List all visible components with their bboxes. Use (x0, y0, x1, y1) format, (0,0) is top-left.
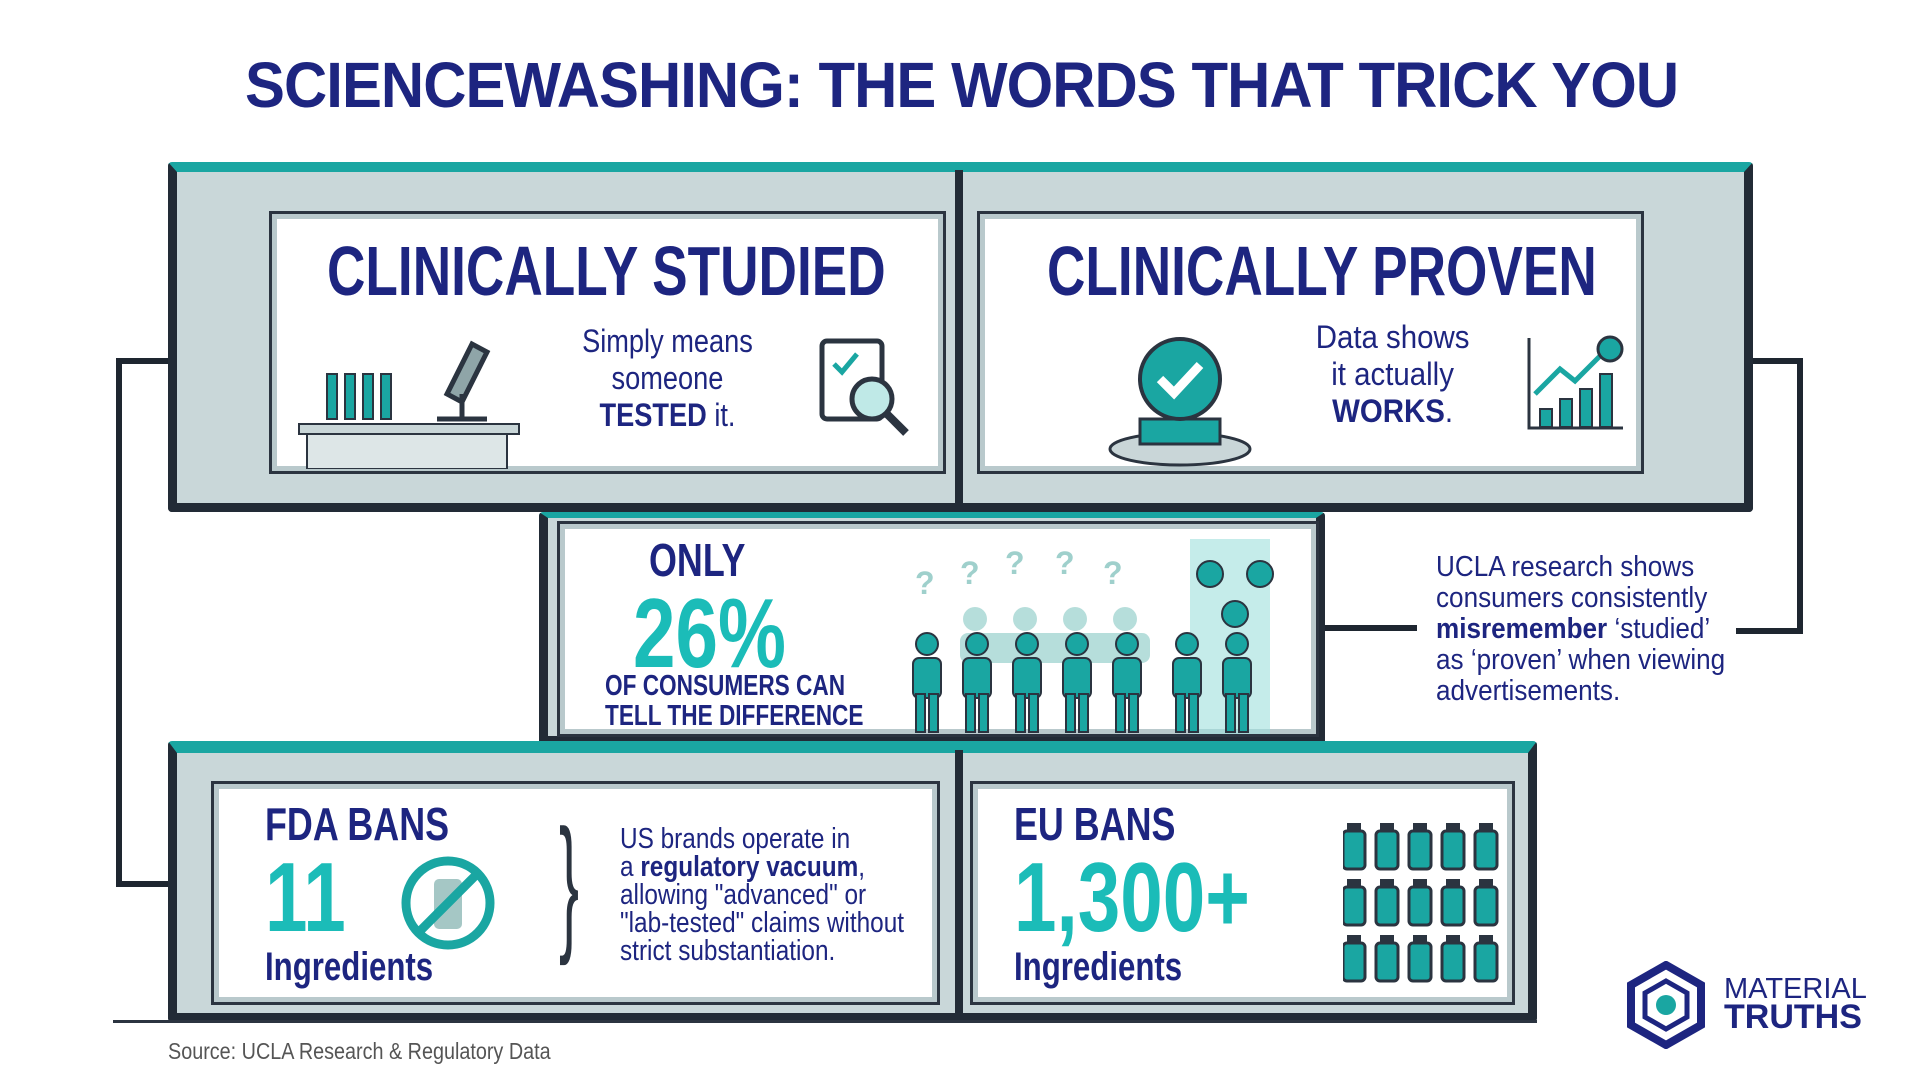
icon: check badge (1108, 337, 1252, 466)
icon: people crowd: ? (1005, 545, 1025, 581)
heading: clinically studied: CLINICALLY STUDIED (327, 232, 886, 310)
panel: top building (168, 162, 1753, 512)
logo: material truths (1627, 961, 1867, 1049)
logo: material truths: TRUTHS (1724, 998, 1862, 1036)
icon: lab bench (298, 340, 520, 469)
icon: people crowd: ? (1103, 555, 1123, 591)
callout: ucla research: consumers consistently (1436, 582, 1707, 614)
panel: only 26% (560, 524, 1316, 734)
icon: bottle grid (1343, 823, 1498, 982)
panel: eu bans (973, 784, 1512, 1002)
icon: people crowd: ? (1055, 545, 1075, 581)
stat: fda 11 (265, 798, 449, 989)
text: us brands: "lab-tested" claims without (620, 907, 904, 939)
text: us brands: a regulatory vacuum, (620, 851, 865, 883)
stat: eu 1300: Ingredients (1014, 945, 1182, 989)
text: data shows: WORKS. (1332, 393, 1454, 429)
text: simply means: Simply means (582, 323, 752, 359)
text: us brands (620, 823, 904, 967)
stat: eu 1300: 1,300+ (1014, 842, 1250, 952)
icon: people crowd (912, 539, 1274, 734)
heading: clinically proven: CLINICALLY PROVEN (1047, 232, 1597, 310)
text: data shows (1316, 319, 1470, 429)
callout: ucla research (1436, 551, 1725, 707)
stat: fda 11: Ingredients (265, 945, 433, 989)
logo: material truths: MATERIAL (1724, 973, 1867, 1005)
icon: people crowd: ? (915, 565, 935, 601)
panel: bottom building (168, 741, 1537, 1022)
stat: eu 1300 (1014, 798, 1250, 989)
stat: only 26%: OF CONSUMERS CAN (605, 670, 845, 702)
panel: clinically proven (980, 214, 1641, 471)
callout: ucla research: UCLA research shows (1436, 551, 1694, 583)
text: simply means: someone (611, 360, 723, 396)
text: simply means: TESTED it. (599, 397, 735, 433)
panel: clinically studied (272, 214, 943, 471)
icon: people crowd: ? (960, 555, 980, 591)
icon: banned bottle (402, 856, 494, 950)
stat: only 26%: ONLY (649, 534, 745, 586)
panel: fda bans: } (559, 798, 579, 966)
text: us brands: strict substantiation. (620, 935, 835, 967)
panel: fda bans (214, 784, 937, 1002)
icon: clipboard (820, 338, 909, 436)
callout: ucla research: as ‘proven’ when viewing (1436, 644, 1725, 676)
stat: only 26%: TELL THE DIFFERENCE (605, 700, 863, 732)
text: simply means (582, 323, 752, 433)
panel: middle box (539, 512, 1325, 745)
title: SCIENCEWASHING: THE WORDS THAT TRICK YOU (245, 49, 1678, 121)
stat: only 26% (605, 534, 863, 732)
stat: only 26%: 26% (633, 578, 786, 688)
icon: growth chart (1528, 336, 1624, 430)
source: Source: UCLA Research & Regulatory Data (168, 1038, 551, 1064)
ground line (113, 1020, 1537, 1023)
text: us brands: allowing "advanced" or (620, 879, 866, 911)
text: data shows: it actually (1332, 356, 1454, 392)
text: us brands: US brands operate in (620, 823, 850, 855)
stat: eu 1300: EU BANS (1014, 798, 1175, 850)
stat: fda 11: FDA BANS (265, 798, 449, 850)
text: data shows: Data shows (1316, 319, 1470, 355)
callout: ucla research: misremember ‘studied’ (1436, 613, 1710, 645)
callout: ucla research: advertisements. (1436, 675, 1620, 707)
stat: fda 11: 11 (265, 842, 346, 952)
